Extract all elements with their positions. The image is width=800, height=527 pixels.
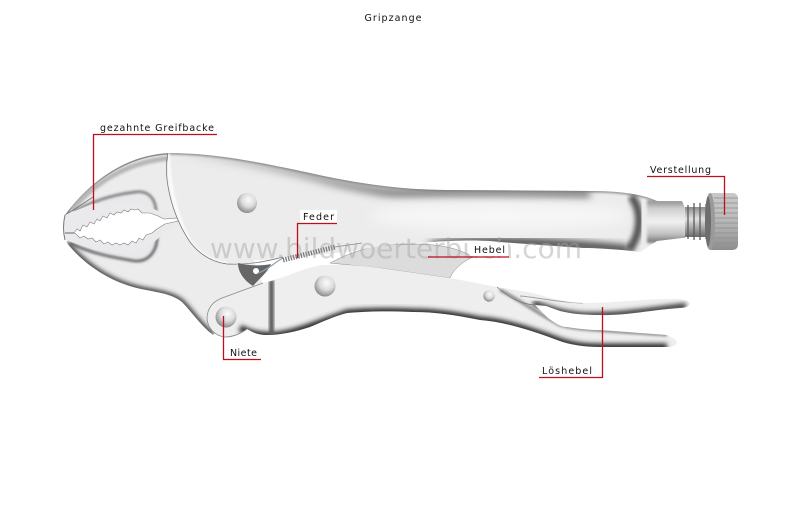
release lever line: [497, 287, 535, 305]
label: Löshebel: Löshebel: [542, 366, 592, 377]
jaw body: [66, 153, 262, 335]
link outline: [207, 283, 263, 337]
spring: [283, 243, 362, 260]
label: gezahnte Greifbacke: [94, 123, 217, 210]
label: Verstellung: [647, 165, 724, 215]
illustration: locking pliers: [60, 150, 738, 350]
label: gezahnte Greifbacke: gezahnte Greifbacke: [100, 123, 214, 134]
lower handle: [208, 265, 690, 347]
label: Hebel: Hebel: [474, 245, 505, 256]
pivot lever: [330, 244, 473, 278]
label: Feder: [298, 210, 337, 258]
locking mechanism: [238, 258, 283, 286]
label: Hebel: [428, 243, 509, 257]
jaw cavity: [65, 192, 157, 261]
upper handle: [160, 150, 690, 264]
label: Feder: Feder: [303, 212, 334, 223]
watermark: www.bildwoerterbuch.com: [210, 232, 582, 265]
title: Gripzange: [364, 13, 422, 24]
rivets: [216, 193, 495, 328]
adjusting screw: [685, 203, 709, 240]
label: Verstellung: Verstellung: [650, 165, 711, 176]
adjusting knob: [705, 193, 738, 250]
label: Niete: Niete: [230, 348, 257, 359]
serrated jaw opening: [64, 203, 182, 254]
label: Löshebel: [539, 307, 602, 378]
label: Niete: [224, 316, 261, 360]
